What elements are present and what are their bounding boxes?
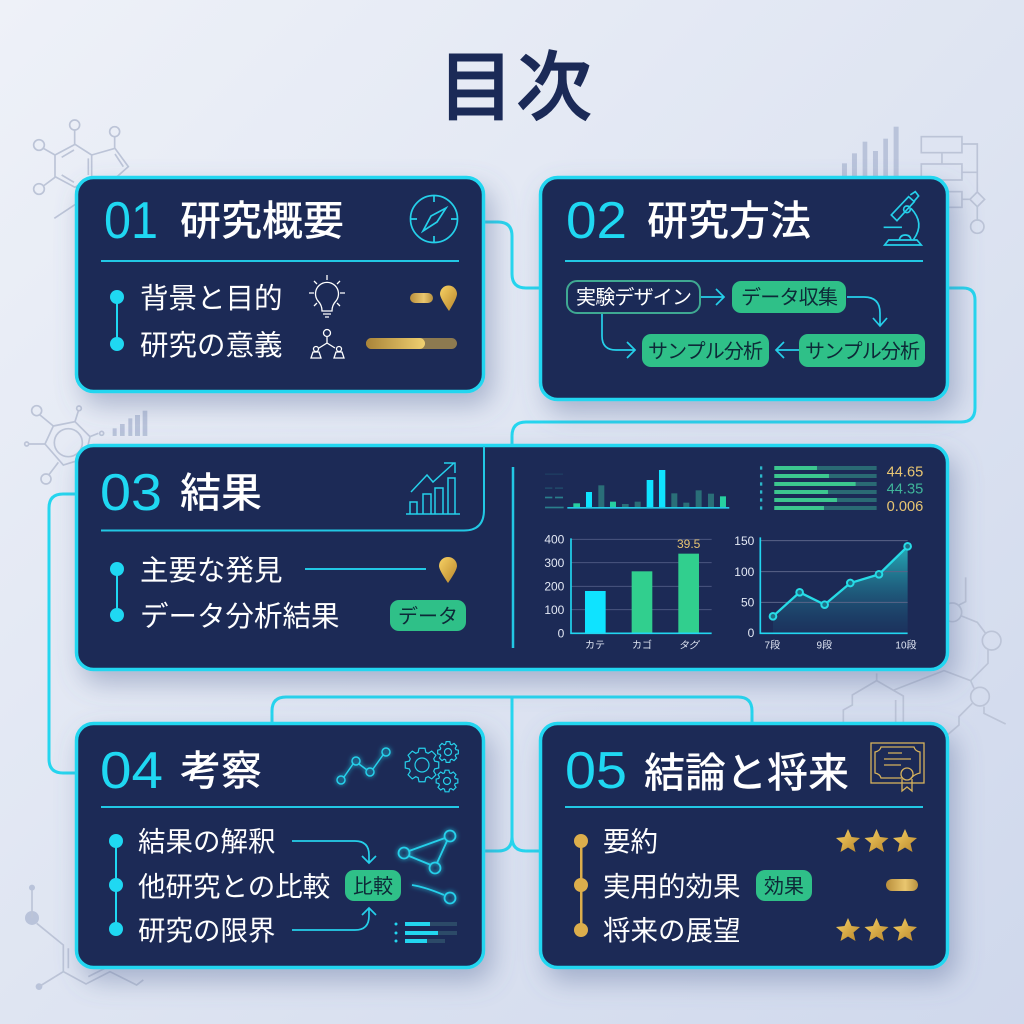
title: 目次 <box>438 26 594 136</box>
line chart: 150 <box>734 534 755 548</box>
bar chart: 200 <box>544 580 565 594</box>
icon: network people <box>311 330 344 358</box>
heading: 考察 <box>180 737 262 797</box>
decoration: molecule middle right <box>843 577 1006 735</box>
stars row 2 <box>836 918 917 941</box>
item: interpretation: 結果の解釈 <box>138 819 276 859</box>
item: data analysis results: データ分析結果 <box>140 594 340 635</box>
decoration: bars and flowchart top right <box>842 127 985 233</box>
badge: effect: 効果 <box>764 870 804 899</box>
icon: rising chart <box>406 463 460 514</box>
decoration: molecule top left <box>34 120 128 218</box>
line chart: 50 <box>741 596 755 610</box>
flow arrow: design to sample <box>602 314 635 358</box>
bar chart: 0 <box>558 626 565 640</box>
icon: glowing line graph <box>337 748 390 784</box>
flow box: data collection: データ収集 <box>741 281 838 310</box>
item: practical effects: 実用的効果 <box>603 864 740 904</box>
horizontal bar list <box>760 466 877 510</box>
item: key findings: 主要な発見 <box>140 548 283 589</box>
icon: microscope <box>884 192 921 245</box>
heading: 研究方法 <box>647 187 811 247</box>
line chart: 7段 <box>765 639 780 652</box>
bar chart: カテ <box>585 640 605 652</box>
heading: 結果 <box>180 459 262 519</box>
panel: 05 conclusion and future <box>540 724 948 968</box>
timeline <box>574 834 588 937</box>
panel: 02 research methods <box>540 178 948 400</box>
decoration: molecule bottom left <box>25 885 143 990</box>
badge: comparison: 比較 <box>353 870 393 899</box>
number 01: 01 <box>104 192 158 250</box>
flow box: experiment design: 実験デザイン <box>576 281 692 310</box>
flow arrow: collection to analysis <box>847 297 887 326</box>
bar chart: 39.5 <box>677 537 701 551</box>
line chart <box>734 534 917 652</box>
number 04: 04 <box>100 742 163 800</box>
arrow: connector 01 to 02 <box>484 222 540 288</box>
flow box: sample analysis left: サンプル分析 <box>648 335 763 364</box>
mini bars <box>394 922 457 943</box>
bar chart: 300 <box>544 556 565 570</box>
arrow: connector 04 to 05 top <box>272 697 752 723</box>
item: summary: 要約 <box>603 819 658 859</box>
flow arrow: design to data collection <box>701 289 724 305</box>
flow arrow: right to left <box>776 342 799 358</box>
bar chart: タグ <box>679 640 701 652</box>
arrow: connector 02 to 03 <box>512 288 975 445</box>
bar chart: 100 <box>544 603 565 617</box>
badge: data: データ <box>398 600 458 629</box>
stars row 1 <box>836 829 917 852</box>
bar chart: 400 <box>544 532 565 546</box>
icon: gears <box>405 742 458 792</box>
item: comparison: 他研究との比較 <box>138 864 330 904</box>
item: significance: 研究の意義 <box>140 323 283 364</box>
line chart: 9段 <box>817 639 832 652</box>
panel: 04 discussion <box>76 724 484 968</box>
icon: light bulb <box>309 275 345 317</box>
gold pill <box>886 879 918 891</box>
number 03: 03 <box>100 464 162 522</box>
item: limitations: 研究の限界 <box>138 908 276 948</box>
item: background and purpose: 背景と目的 <box>140 276 283 317</box>
heading: 研究概要 <box>180 187 344 247</box>
arrow: connector 04 and 05 to centre <box>484 697 540 851</box>
heading: 結論と将来 <box>644 739 849 799</box>
number 02: 02 <box>566 192 627 250</box>
line chart: 0 <box>748 626 755 640</box>
badge: comparison <box>345 870 401 901</box>
value labels: 0.006 <box>887 499 923 515</box>
arrow: to comparison from above <box>292 841 376 863</box>
arrow: connector 03 to 04 <box>49 494 76 773</box>
line chart: 100 <box>734 565 755 579</box>
value labels: 44.65 <box>887 465 923 481</box>
icon: compass <box>410 196 458 242</box>
timeline <box>110 562 124 622</box>
icon: glowing network <box>398 830 456 904</box>
timeline <box>109 834 123 936</box>
panel: 03 results <box>76 446 948 670</box>
timeline <box>110 290 124 351</box>
bar chart <box>544 532 712 652</box>
line chart: 10段 <box>895 639 917 652</box>
gold progress bar <box>366 338 457 349</box>
bar chart: カゴ <box>632 639 652 652</box>
mini bar chart <box>545 470 729 509</box>
icon: gold pin <box>439 557 457 583</box>
decoration: molecule and bars middle left <box>25 406 147 484</box>
gold pill and pin <box>410 286 457 311</box>
flow box: sample analysis right: サンプル分析 <box>805 335 920 364</box>
number 05: 05 <box>565 742 627 800</box>
badge: effect <box>756 870 812 901</box>
icon: certificate <box>871 743 924 791</box>
item: future outlook: 将来の展望 <box>603 908 740 948</box>
arrow: to comparison from below <box>292 908 376 930</box>
value labels: 44.35 <box>887 481 923 497</box>
panel: 01 research overview <box>76 178 484 392</box>
value labels <box>887 465 923 515</box>
header frame line <box>101 446 484 530</box>
